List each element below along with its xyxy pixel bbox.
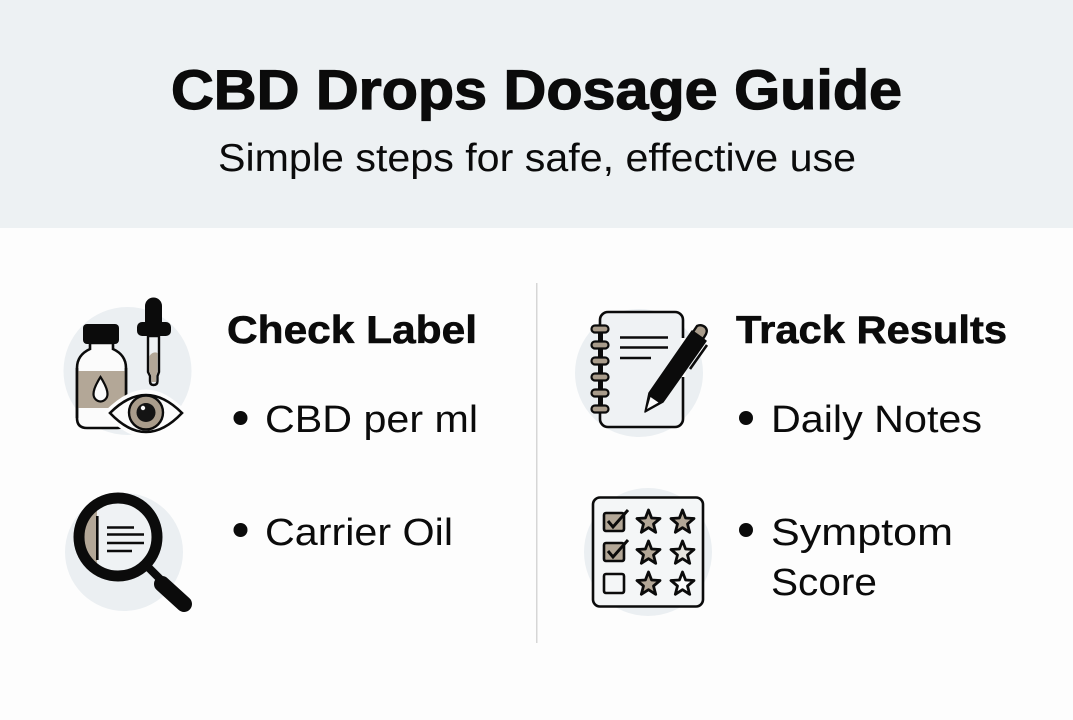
icon: notebook and pen (575, 309, 707, 437)
pen (645, 325, 707, 412)
notebook (592, 312, 683, 427)
bullet: daily notes: Daily Notes (771, 399, 982, 441)
icon: symptom score checklist (584, 488, 712, 616)
dropper (137, 298, 171, 385)
bullet: CBD per ml: CBD per ml (265, 399, 478, 441)
header band (0, 0, 1073, 228)
bullet: carrier oil: Carrier Oil (265, 512, 453, 554)
heading: track results: Track Results (736, 309, 1007, 352)
heading: check label: Check Label (227, 309, 477, 352)
panel: check label (64, 298, 478, 611)
bullet: symptom score (739, 512, 953, 604)
icon: bottle, dropper and eye (64, 298, 192, 435)
panel: track results (575, 309, 1007, 616)
bullet: symptom score: Score (771, 562, 877, 604)
stars (637, 510, 694, 594)
checkboxes (604, 510, 628, 593)
subtitle: Simple steps for safe, effective use (218, 137, 856, 180)
title: CBD Drops Dosage Guide (171, 58, 902, 121)
bottle (77, 324, 126, 428)
eye (108, 393, 183, 434)
icon: magnifying glass (65, 493, 184, 611)
bullet: symptom score: Symptom (771, 512, 953, 554)
